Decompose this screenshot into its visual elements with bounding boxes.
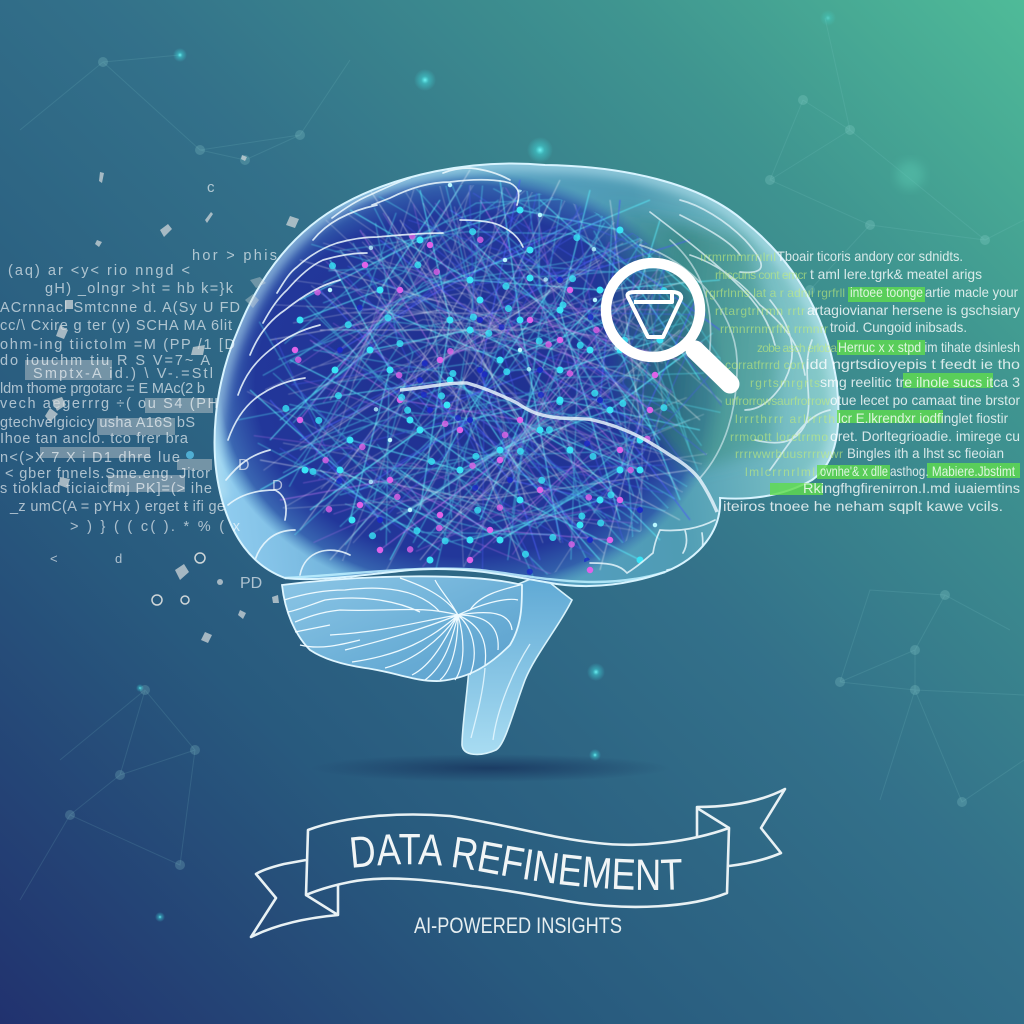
title: DATA REFINEMENT xyxy=(351,834,682,890)
pale rim glow xyxy=(215,163,838,500)
green garbled text on brain: rgrtsmrgrts xyxy=(750,376,820,390)
green garbled text on brain: rrrrwwrbuusrrrrwwr xyxy=(735,447,843,461)
right refined text with green highlights xyxy=(700,248,1020,514)
right refined text with green highlights: Rkingfhgfirenirron.I.md iuaiemtins xyxy=(803,480,1020,496)
green garbled text on brain: rhiccuns cont emcr xyxy=(715,268,807,282)
left scattered raw data text: < gber fnnels.Sme.eng. Jitor xyxy=(5,466,210,482)
right refined text with green highlights: intoee toonge xyxy=(850,284,923,300)
left scattered raw data text: Smptx-A id.) \ V-.=Stl xyxy=(33,366,213,382)
left scattered raw data text: n<(>X 7 X i D1 dhre lue xyxy=(0,450,180,466)
neural nodes xyxy=(295,185,660,570)
left scattered raw data text: D xyxy=(238,457,250,474)
left scattered raw data text: ACrnnacl Smtcnne d. A(Sy U FD xyxy=(0,300,240,316)
banner ribbon xyxy=(251,789,785,937)
left scattered raw data text: vech aegerrrg ÷( ou S4 (PH xyxy=(0,396,218,412)
glowing background particles xyxy=(136,10,924,922)
subtitle: AI-POWERED INSIGHTS xyxy=(414,913,622,938)
right refined text with green highlights: Tboair ticoris andory cor sdnidts. xyxy=(777,248,963,264)
left scattered raw data text: do iouchm tiu R S V=7~ A xyxy=(0,353,210,369)
brain ground shadow xyxy=(310,754,670,782)
left scattered raw data text: c xyxy=(207,179,215,196)
cerebellum folia lines xyxy=(284,578,520,680)
green garbled text on brain: corratfrrrd corr xyxy=(725,358,805,372)
outer brain gyri folds xyxy=(226,168,830,575)
left scattered raw data text: ohm-ing tiictolm =M (PP /1 [D xyxy=(0,337,235,353)
left scattered raw data text: PD xyxy=(240,575,262,592)
cerebrum xyxy=(214,162,840,588)
left scattered raw data text: (aq) ar <y< rio nngd < xyxy=(8,263,190,279)
left scattered raw data text: gtechvelgicicy usha A16S bS xyxy=(0,415,195,431)
green garbled text on brain: urfrorrowsaurfrorrow xyxy=(725,394,830,408)
neural network strands xyxy=(250,170,720,570)
right refined text with green highlights: iteiros tnoee he neham sqplt kawe vcils. xyxy=(723,498,1003,514)
left scattered raw data text: _z umC(A = pYHx ) erget ŧ ifi ge xyxy=(9,499,225,515)
right refined text with green highlights: oret. Dorltegrioadie. imirege cu xyxy=(830,428,1020,444)
frontal lobe teal tint xyxy=(610,211,784,473)
left scattered raw data text: < xyxy=(50,551,58,566)
right refined text with green highlights: smg reelitic tre ilnole sucs itca 3 xyxy=(820,374,1020,390)
right refined text with green highlights: ovnhe'& x dlle xyxy=(820,463,888,479)
green garbled text on brain: rgrfrlnns lat a r adnıi rgrfrll xyxy=(705,286,845,300)
grey highlight boxes on raw text xyxy=(25,360,213,492)
green garbled text on brain: rrmoott lorctrrmo xyxy=(730,430,828,444)
ribbon left tail xyxy=(251,860,338,937)
sylvian fissure and temporal lobe arc xyxy=(400,383,717,512)
left scattered raw data text: gH) _olngr >ht = hb k=}k xyxy=(45,281,234,297)
left scattered raw data text: d xyxy=(115,551,122,566)
right refined text with green highlights: t aml lere.tgrk& meatel arigs xyxy=(810,266,982,282)
green garbled text on brain: lmlcrrnrlml xyxy=(745,465,815,479)
right refined text with green highlights: idd ngrtsdioyepis t feedt ie tho xyxy=(806,356,1020,372)
left scattered raw data text: hor > phis xyxy=(192,248,277,264)
green garbled text on brain: rrtargtrrrmn rrtr xyxy=(715,304,805,318)
cerebellum xyxy=(282,576,522,681)
brain stem xyxy=(462,575,572,754)
ribbon main band xyxy=(306,815,729,907)
dark neural core xyxy=(216,174,718,583)
right refined text with green highlights: troid. Cungoid inibsads. xyxy=(830,319,967,335)
green garbled text on brain: ırrmrmmrrrılrıl xyxy=(700,250,776,264)
green highlight boxes xyxy=(770,287,1020,495)
right refined text with green highlights: Bingles ith a lhst sc fieoian xyxy=(847,445,1004,461)
green garbled text on brain: lrrrthrrr arlrrrth xyxy=(735,412,835,426)
scattered data fragments xyxy=(45,155,299,643)
left scattered raw data text: > ) } ( ( c( ). * % ( x xyxy=(70,519,241,535)
right refined text with green highlights: artagiovianar hersene is gschsiary xyxy=(807,302,1020,318)
right refined text with green highlights: otue lecet po camaat tine brstor xyxy=(830,392,1020,408)
left scattered raw data text: D xyxy=(272,477,283,494)
green garbled text on brain xyxy=(700,250,845,479)
green garbled text on brain: zobe asch erloba xyxy=(757,341,837,355)
left scattered raw data text xyxy=(0,179,283,592)
green garbled text on brain: rrmnrrnmrffıt rrmnrr xyxy=(720,322,828,336)
icon: magnifying glass with funnel xyxy=(606,263,730,384)
right refined text with green highlights: artie macle your xyxy=(925,284,1018,300)
dense neural strands in core xyxy=(238,185,722,576)
extra small nodes in core xyxy=(282,189,668,575)
left scattered raw data text: ldm thome prgotarc = E MAc(2 b xyxy=(0,381,205,397)
left scattered raw data text: Ihoe tan anclo. tco frer bra xyxy=(0,431,189,447)
ribbon right tail xyxy=(697,789,785,866)
right refined text with green highlights: lcr E.lkrendxr iodfinglet fiostir xyxy=(838,410,1008,426)
left scattered raw data text: s tioklad ticiaicfmj PK]=(> ihe xyxy=(0,481,212,497)
brain outline xyxy=(215,163,838,586)
funnel glyph xyxy=(627,292,681,337)
left scattered raw data text: cc/\ Cxire g ter (y) SCHA MA 6lit xyxy=(0,318,232,334)
